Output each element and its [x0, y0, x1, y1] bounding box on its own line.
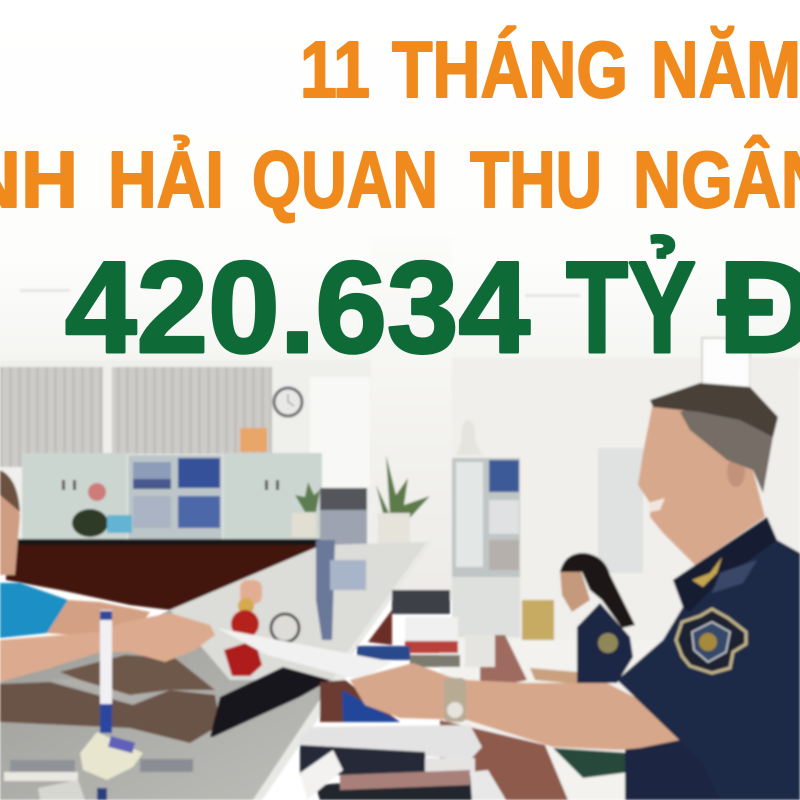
wall clock — [274, 388, 302, 416]
dark shadow on glass — [210, 667, 330, 737]
neck and face — [638, 405, 765, 565]
reflection on glass — [170, 542, 428, 680]
left clerk — [0, 470, 215, 682]
orange box — [240, 428, 267, 452]
epaulette — [712, 560, 757, 593]
arm — [350, 663, 680, 750]
curtains — [0, 367, 272, 467]
collar — [673, 517, 777, 612]
statue bust — [456, 420, 482, 455]
items behind counter — [357, 590, 495, 667]
keypad and pen bottom left — [4, 759, 193, 800]
lower torso — [625, 740, 800, 800]
brown wood counter — [480, 635, 527, 690]
window — [702, 338, 750, 388]
title line 2: QUAN — [252, 135, 438, 224]
left wall — [0, 360, 372, 550]
plant small — [292, 482, 320, 537]
flowers — [72, 483, 132, 537]
right wall — [452, 358, 800, 648]
ear — [727, 457, 745, 487]
right pillar — [750, 358, 800, 558]
green bag — [553, 748, 630, 778]
title line 1 — [300, 25, 800, 114]
cabinet far right — [598, 448, 643, 573]
hair top — [650, 383, 778, 437]
printer — [320, 488, 367, 590]
watch — [444, 678, 466, 722]
cabinet right — [452, 458, 520, 637]
glass surface — [0, 610, 333, 800]
document handed over — [217, 628, 393, 680]
arm reflection — [0, 655, 220, 743]
back doorway — [310, 377, 370, 487]
plant on shelf — [376, 455, 430, 543]
pen — [97, 610, 112, 800]
floor — [440, 640, 800, 800]
headline figure: TỶ — [566, 234, 696, 380]
pen holder — [80, 732, 143, 780]
background officer — [530, 553, 635, 778]
headline figure — [65, 234, 800, 380]
desk clock reflection — [271, 614, 299, 642]
blue sleeve under wrist — [320, 680, 400, 722]
under-arm documents — [300, 725, 506, 800]
back desk — [6, 545, 322, 610]
hair sides — [680, 395, 775, 493]
background ceiling — [0, 0, 800, 370]
cabinets left — [22, 453, 322, 539]
mouth — [648, 498, 665, 512]
printer reflection — [316, 540, 335, 640]
uniform — [617, 517, 800, 800]
office photo scene — [0, 238, 800, 800]
title line 1: THÁNG — [392, 25, 628, 114]
main officer — [350, 383, 800, 800]
title line 2: HẢI — [108, 135, 224, 224]
title line 2 — [0, 135, 800, 224]
red figurine — [224, 580, 262, 676]
gold collar pin — [692, 557, 722, 587]
badge — [676, 609, 746, 673]
cardboard box — [522, 600, 554, 642]
title line 2: THU — [470, 135, 602, 224]
headline figure: 420.634 — [65, 234, 530, 380]
glass edge — [253, 540, 432, 800]
title line 1: 11 — [300, 25, 370, 114]
ceiling lights — [20, 289, 580, 297]
column — [371, 238, 452, 600]
blue base reflection — [330, 560, 366, 590]
